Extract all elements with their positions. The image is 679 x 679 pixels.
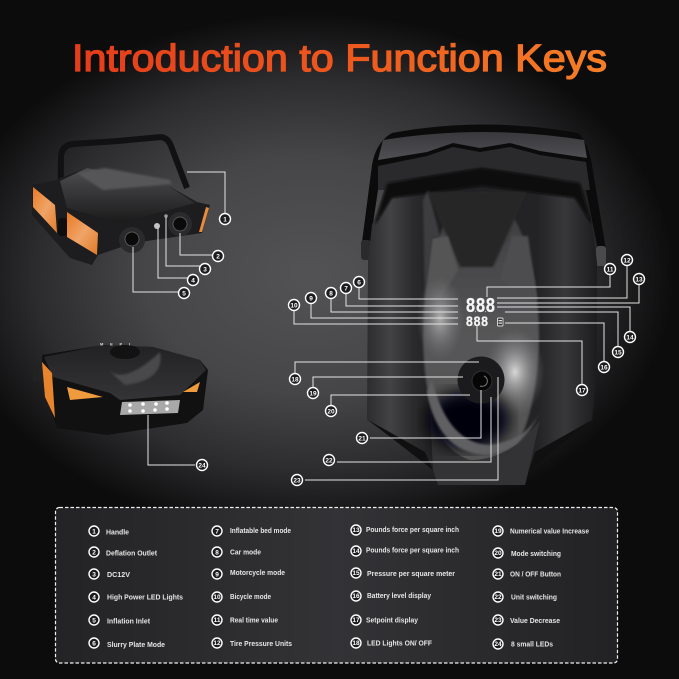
legend column 2: 11 xyxy=(214,617,221,624)
legend column 2: 12 xyxy=(213,640,221,647)
legend column 2: Bicycle mode xyxy=(230,594,271,601)
legend column 3: 16 xyxy=(352,593,360,600)
legend column 3: Pressure per square meter xyxy=(367,571,455,578)
callouts: large top view: 12 xyxy=(623,258,631,264)
side connector xyxy=(33,365,41,381)
device: small front view xyxy=(33,342,208,435)
legend column 2: 9 xyxy=(215,572,219,578)
legend column 1: 1 xyxy=(92,528,96,536)
callouts: small rear view: 3 xyxy=(203,266,207,274)
center panel xyxy=(416,190,545,485)
legend column 3: 17 xyxy=(352,617,360,624)
legend column 4: 23 xyxy=(494,617,502,624)
legend column 4: 22 xyxy=(494,594,502,601)
legend column 1: High Power LED Lights xyxy=(107,594,183,602)
legend column 4: ON / OFF Button xyxy=(510,572,561,578)
legend column 1: Slurry Plate Mode xyxy=(107,642,165,649)
dial top xyxy=(110,345,140,359)
rear handle xyxy=(60,137,187,225)
legend column 1: Handle xyxy=(106,530,129,536)
LED display: 8.8.8 xyxy=(466,294,495,317)
callouts: small rear view: 1 xyxy=(223,216,227,224)
legend column 3: Pounds force per square inch xyxy=(366,527,459,534)
callouts: large top view: 21 xyxy=(358,436,366,442)
callouts: large top view: 15 xyxy=(614,350,622,356)
callout: small front view xyxy=(148,415,208,470)
legend column 4: 19 xyxy=(494,528,502,535)
callouts: large top view: 14 xyxy=(626,334,634,342)
legend column 3: 18 xyxy=(352,640,360,647)
legend column 3: Pounds force per square inch xyxy=(366,548,459,554)
title: Introduction to Function Keys xyxy=(72,38,607,80)
body xyxy=(367,168,597,485)
legend column 3: Battery level display xyxy=(367,593,431,600)
callouts: large top view: 22 xyxy=(325,458,333,464)
legend column 4: 21 xyxy=(494,571,502,578)
legend column 1: DC12V xyxy=(107,572,130,579)
legend column 1: 5 xyxy=(92,618,96,624)
legend column 3: 15 xyxy=(352,570,360,577)
callouts: large top view: 7 xyxy=(344,286,348,292)
legend column 2: 8 xyxy=(215,550,219,556)
legend column 4 xyxy=(493,526,589,649)
orange wings xyxy=(42,362,55,418)
callouts: large top view xyxy=(288,254,644,486)
legend column 1: 6 xyxy=(92,640,96,648)
legend column 3: 13 xyxy=(352,527,360,534)
control dial xyxy=(458,356,504,404)
callout: small front view: 24 xyxy=(198,462,206,470)
legend column 3: 14 xyxy=(352,548,360,555)
legend column 1: 2 xyxy=(92,550,96,556)
legend column 2: 7 xyxy=(215,528,219,536)
callouts: large top view: 20 xyxy=(327,408,335,416)
legend column 1: Inflation Inlet xyxy=(107,618,151,626)
legend column 4: Mode switching xyxy=(511,551,561,558)
legend column 1: 3 xyxy=(92,572,96,578)
handle pivot xyxy=(58,218,67,236)
device: large top view xyxy=(361,124,606,485)
inflation inlet xyxy=(119,227,145,253)
legend column 4: 20 xyxy=(494,550,502,557)
legend column 4: 8 small LEDs xyxy=(511,642,553,648)
legend column 2: Real time value xyxy=(230,618,278,624)
panel: key legend xyxy=(56,508,618,663)
legend column 4: Value Decrease xyxy=(510,618,560,625)
callouts: large top view: 11 xyxy=(607,266,614,274)
deflation outlet xyxy=(168,212,192,236)
brand label: MEPI xyxy=(100,342,130,346)
legend column 1 xyxy=(89,526,183,649)
legend column 2: Car mode xyxy=(230,550,261,556)
callouts: large top view: 13 xyxy=(635,276,643,284)
callouts: large top view: 17 xyxy=(578,388,586,394)
rear body xyxy=(32,168,210,265)
handle xyxy=(361,124,606,266)
callouts: small rear view xyxy=(133,172,230,298)
callouts: large top view: 18 xyxy=(291,376,299,384)
legend column 2: Tire Pressure Units xyxy=(230,641,292,648)
legend column 3: Setpoint display xyxy=(366,618,418,624)
legend column 2: Inflatable bed mode xyxy=(230,528,291,535)
dark arch under handle xyxy=(375,168,592,225)
orange side panels xyxy=(33,187,57,233)
callouts: large top view: 16 xyxy=(600,364,608,372)
legend column 3: LED Lights ON/ OFF xyxy=(367,640,433,648)
legend column 2 xyxy=(212,526,292,648)
legend column 4: 24 xyxy=(494,641,502,648)
callouts: large top view: 19 xyxy=(309,390,317,398)
LED display xyxy=(466,294,503,329)
callouts: large top view: 8 xyxy=(329,290,333,298)
hood highlight xyxy=(108,352,161,385)
led light and dc port xyxy=(154,214,168,229)
legend column 4: Numerical value Increase xyxy=(510,528,589,536)
legend column 1: 4 xyxy=(92,594,96,602)
LED display: 8.8.8 xyxy=(466,313,488,329)
LED strip xyxy=(120,400,180,415)
legend column 2: 10 xyxy=(213,594,221,601)
lower side shards xyxy=(368,420,592,473)
callouts: small rear view: 4 xyxy=(191,278,195,284)
front body xyxy=(42,345,208,435)
callouts: small rear view: 2 xyxy=(216,254,220,260)
legend column 1: Deflation Outlet xyxy=(106,550,158,558)
legend column 4: Unit switching xyxy=(511,594,557,602)
legend column 3 xyxy=(351,525,459,648)
callouts: small rear view: 5 xyxy=(182,290,186,298)
device: small rear view xyxy=(32,137,210,265)
callouts: large top view: 9 xyxy=(309,296,313,302)
legend column 2: Motorcycle mode xyxy=(230,570,285,577)
callouts: large top view: 10 xyxy=(290,302,298,310)
callouts: large top view: 6 xyxy=(357,280,361,286)
callouts: large top view: 23 xyxy=(293,478,301,484)
